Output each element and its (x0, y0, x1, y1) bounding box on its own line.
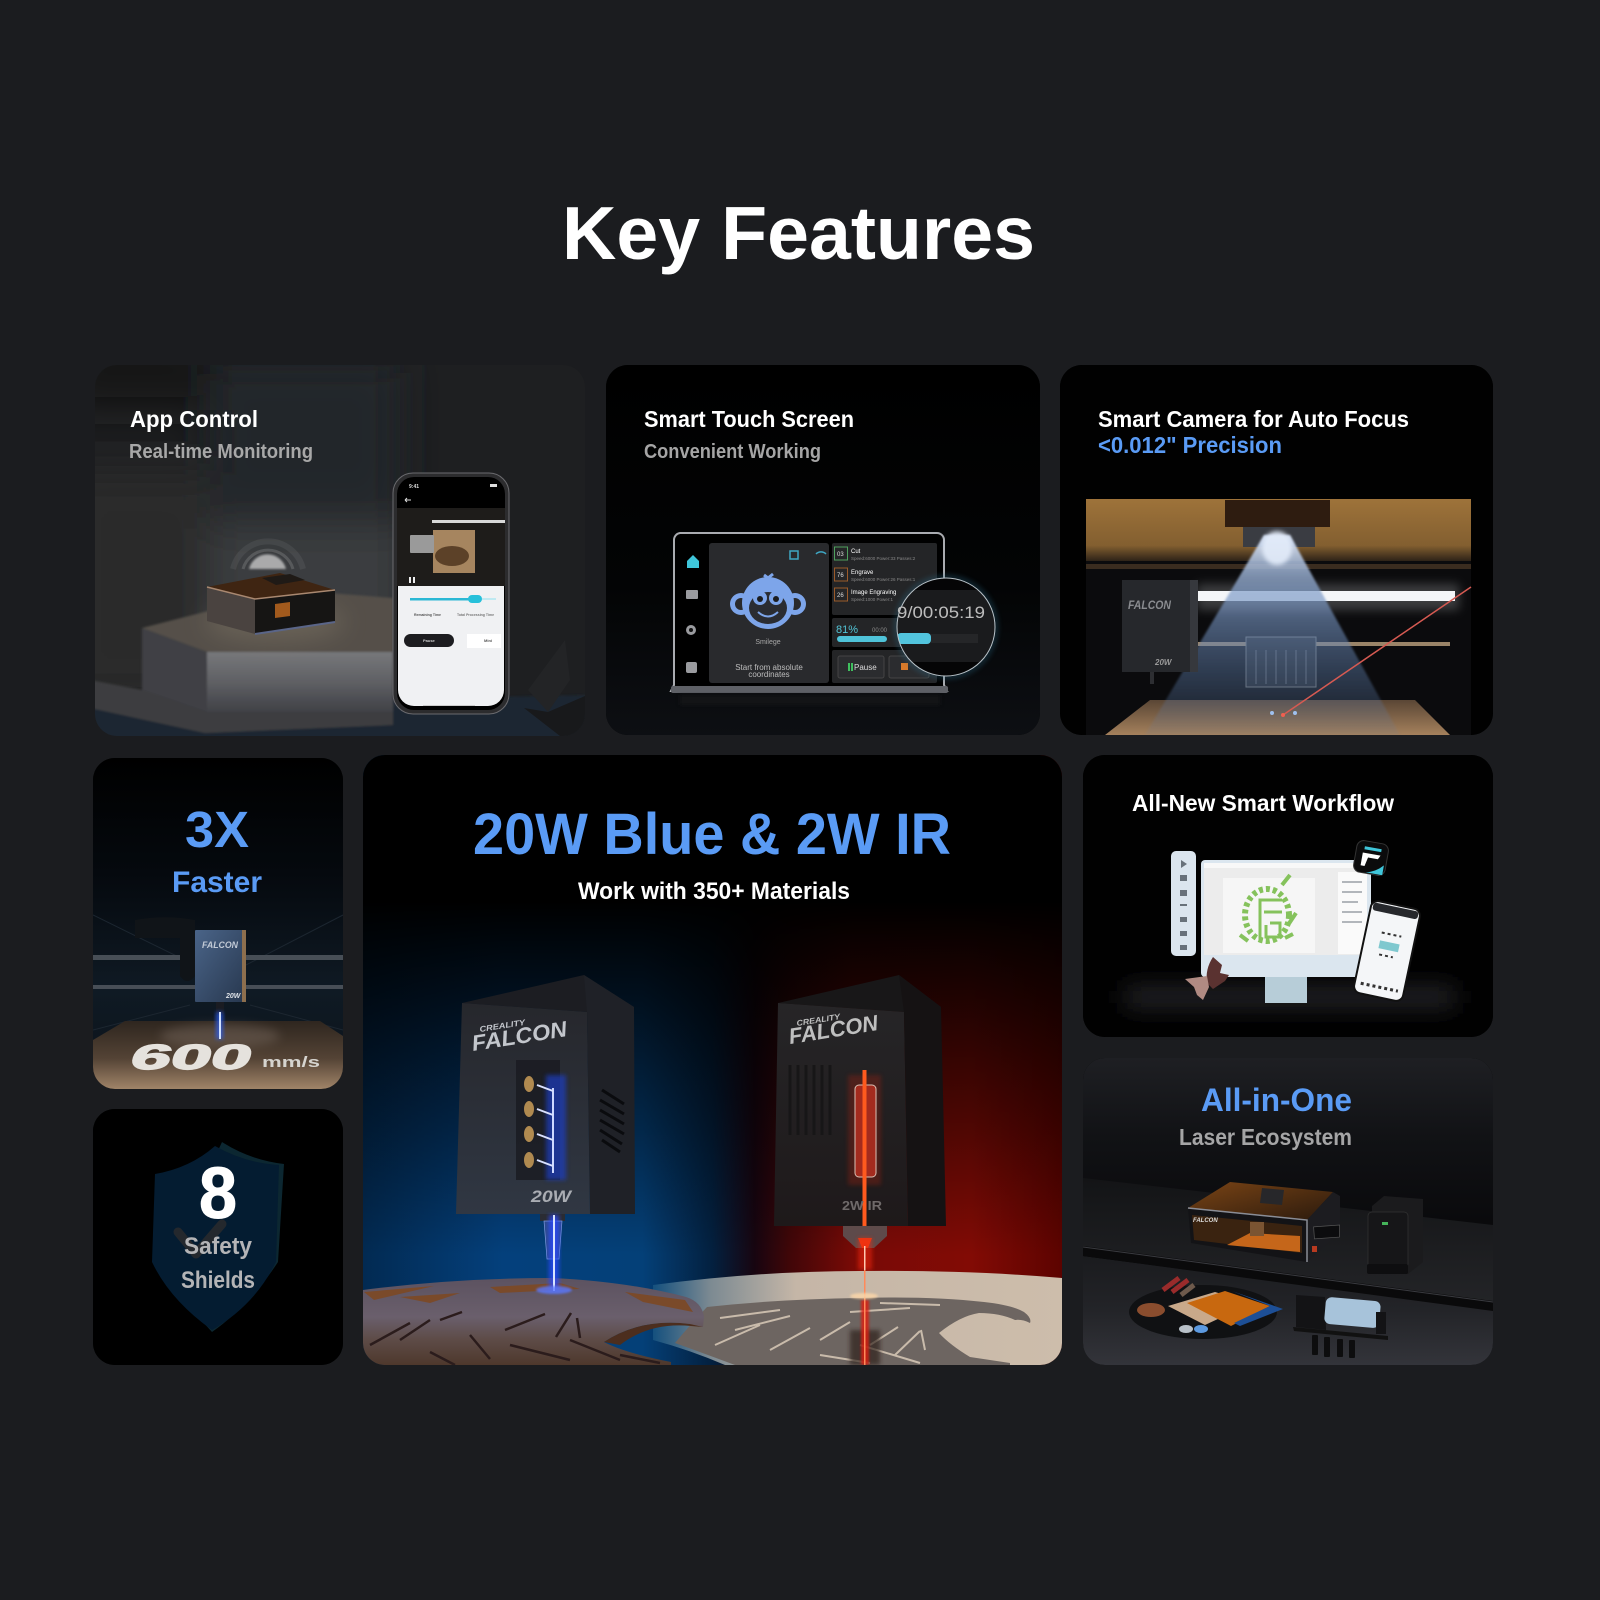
logo: green F wreath (1240, 875, 1296, 941)
engraved disc: wood material (363, 1278, 704, 1365)
blue laser module: CREALITY (479, 1018, 527, 1034)
label: Shields (181, 1267, 255, 1294)
laser module (195, 930, 246, 1014)
subheading: Work with 350+ Materials (578, 878, 850, 905)
panel: smart workflow (1083, 755, 1493, 1037)
speed label (125, 1037, 320, 1077)
touch screen device: Start from absolute (735, 663, 803, 672)
air purifier box (1367, 1196, 1423, 1274)
phone with app: Pause (423, 638, 436, 643)
title: Key Features (562, 191, 1035, 275)
panel: smart touch screen (606, 365, 1040, 735)
label: Safety (184, 1233, 253, 1260)
red laser module: 2W IR (842, 1198, 883, 1213)
big number: 8 (199, 1154, 237, 1234)
laser module: 20W (225, 993, 242, 1000)
blue laser module (456, 975, 635, 1259)
butterfly (1185, 957, 1229, 1000)
panel: 20W blue and 2W IR (363, 755, 1062, 1365)
heading: Smart Camera for Auto Focus (1098, 406, 1409, 432)
laser module: FALCON (202, 940, 238, 950)
materials tray (1129, 1278, 1283, 1339)
touch screen device: 81% (836, 624, 858, 636)
label (181, 1233, 255, 1294)
phone (1353, 900, 1421, 1002)
magnifier: timer: 9/00:05:19 (897, 603, 985, 622)
red laser module: FALCON (787, 1010, 881, 1049)
touch screen device: 26 (837, 593, 844, 599)
icon: wifi waves (233, 541, 303, 569)
rails (93, 955, 343, 989)
laser engraver device (207, 573, 335, 634)
red laser beam (858, 1238, 872, 1272)
speed label: 600 (125, 1037, 258, 1077)
touch screen device: Image Engraving (851, 590, 896, 596)
panel: all-in-one ecosystem (1083, 1058, 1493, 1365)
speed label: mm/s (262, 1054, 320, 1071)
icon: shield (152, 1142, 284, 1332)
app icon (1352, 839, 1390, 877)
touch screen device: Speed:6000 Power:33 Passes:2 (851, 556, 916, 561)
red laser module (774, 975, 946, 1248)
phone with app: Remaining Time (414, 613, 441, 617)
icon: monkey mascot (730, 574, 806, 629)
subheading: Convenient Working (644, 441, 821, 463)
panel: 3X faster (93, 758, 343, 1089)
touch screen device: Cut (851, 549, 861, 555)
blue laser module: 20W (530, 1187, 573, 1206)
laser engraver with enclosure (1188, 1182, 1340, 1262)
subheading: Laser Ecosystem (1179, 1124, 1352, 1150)
touch screen device: 76 (837, 573, 844, 579)
touch screen device (671, 533, 948, 705)
touch screen device: Smilege (755, 639, 781, 646)
touch screen device: 00:00 (872, 628, 888, 634)
wood surface (93, 1021, 343, 1089)
touch screen device: Speed:1000 Power:1 (851, 597, 894, 602)
subheading: Real-time Monitoring (129, 441, 313, 463)
rotary attachment (1293, 1295, 1388, 1340)
red laser module: CREALITY (796, 1012, 841, 1028)
precision callout: <0.012" Precision (1098, 432, 1282, 458)
magnifier: timer (893, 574, 999, 680)
heading: All-New Smart Workflow (1132, 790, 1394, 816)
phone with app: Total Processing Time (457, 613, 494, 617)
label: Faster (172, 866, 262, 899)
heading: Smart Touch Screen (644, 406, 854, 432)
touch screen device: Speed:6000 Power:26 Passes:1 (851, 577, 916, 582)
panel: smart camera (1060, 365, 1493, 735)
phone with app (393, 473, 509, 714)
touch screen device: Engrave (851, 570, 874, 576)
laser engraver with enclosure: FALCON (1193, 1218, 1218, 1224)
heading: 20W Blue & 2W IR (473, 802, 951, 867)
monitor (1201, 860, 1371, 1003)
big number: 3X (185, 801, 249, 858)
touch screen device: 03 (837, 552, 844, 558)
panel: safety shields (93, 1109, 343, 1365)
heading: App Control (130, 406, 258, 432)
camera interior scene (1086, 499, 1471, 735)
engraved disc: light material (653, 1270, 1062, 1365)
heading: All-in-One (1201, 1082, 1352, 1118)
camera interior scene: 20W (1154, 658, 1173, 667)
camera interior scene: FALCON (1128, 598, 1171, 612)
phone with app: Mini (484, 638, 492, 643)
toolbar (1171, 851, 1196, 956)
blue laser beam (216, 1012, 223, 1039)
laptop (524, 640, 585, 736)
blue laser module: FALCON (470, 1016, 570, 1056)
rotary pegs (1312, 1335, 1355, 1358)
phone with app: 9:41 (409, 484, 419, 490)
touch screen device: coordinates (748, 670, 790, 679)
panel: app control (95, 365, 585, 736)
touch screen device: Pause (854, 663, 877, 672)
blue laser beam (536, 1215, 572, 1294)
